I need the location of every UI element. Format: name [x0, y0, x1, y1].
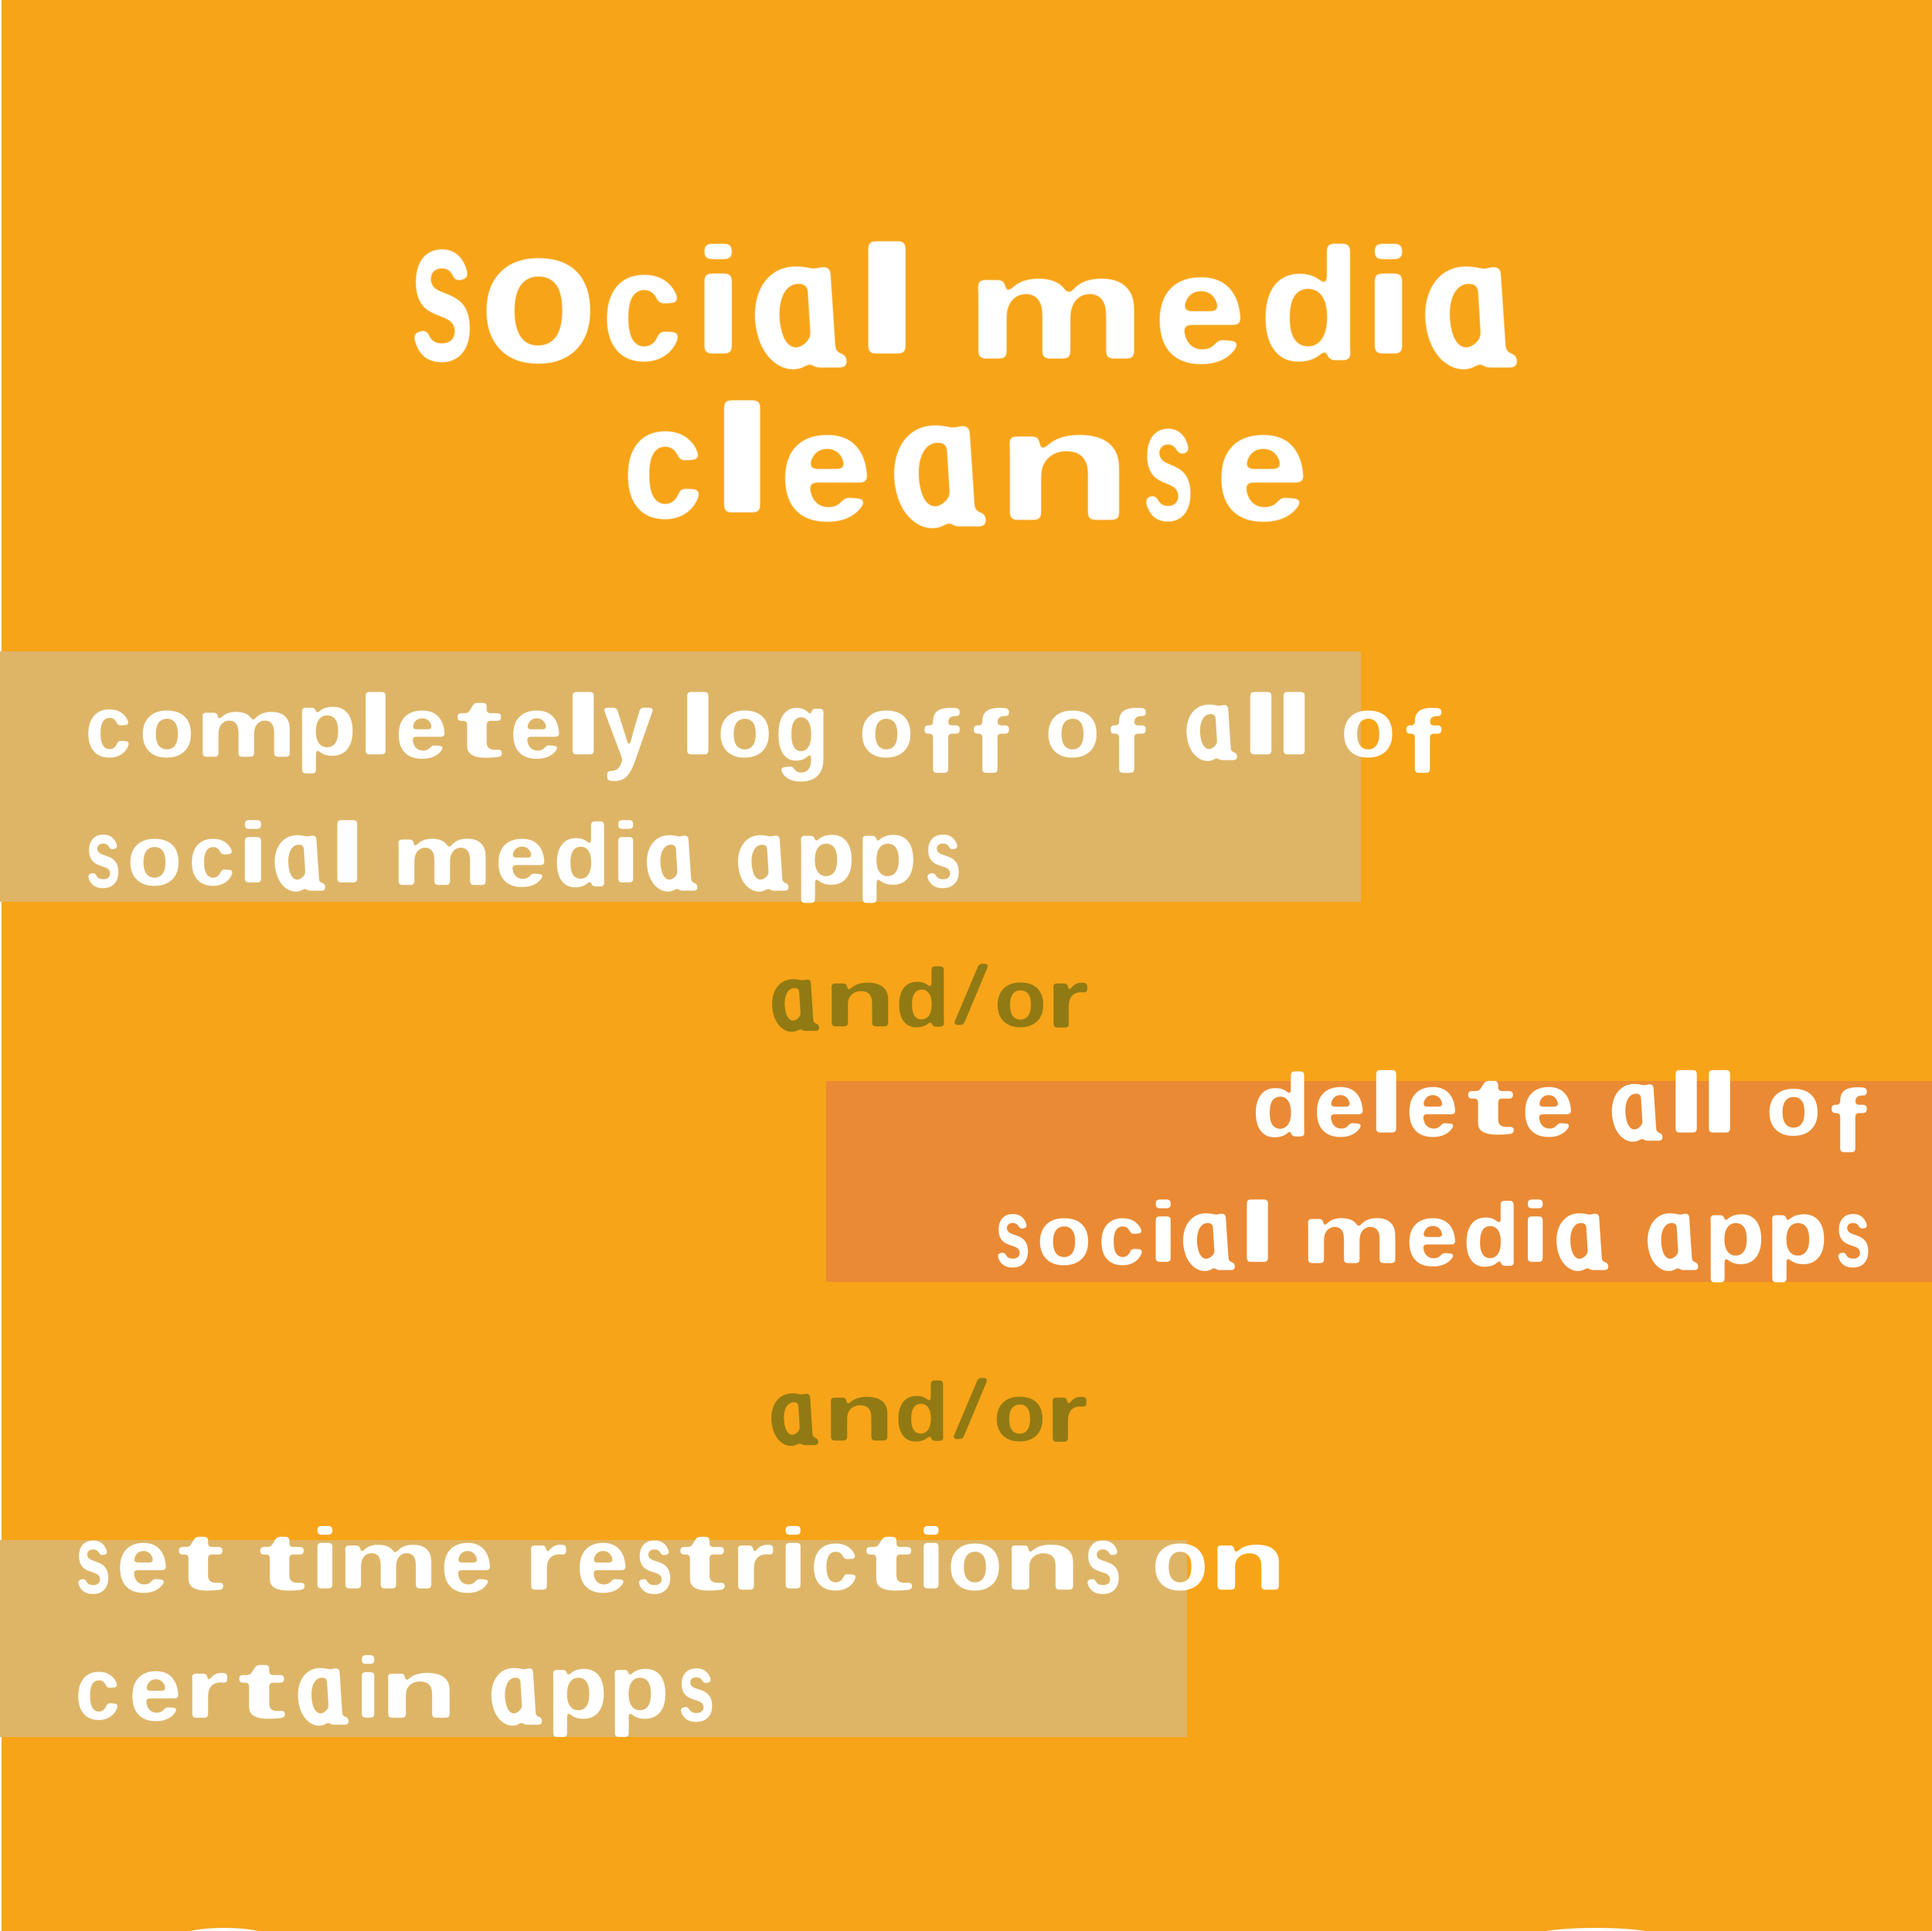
- connector: and/or: [756, 940, 1090, 1051]
- text: set time restrictions: e: [129, 1639, 182, 1740]
- text: delete all of: d: [1252, 1056, 1311, 1156]
- text: set time restrictions: s: [1085, 1505, 1122, 1615]
- title: a: [723, 189, 864, 405]
- connector: and/or: r: [1045, 1367, 1088, 1460]
- text: set time restrictions: s: [679, 1634, 715, 1743]
- text: completely log off: a: [720, 793, 798, 912]
- text: set time restrictions: i: [917, 1511, 947, 1607]
- text: set time restrictions: i: [778, 1511, 808, 1607]
- connector: and/or: d: [895, 1366, 949, 1459]
- text: completely log off: a: [629, 793, 707, 912]
- text: set time restrictions: t: [178, 1517, 226, 1608]
- text: completely log off: f: [1404, 692, 1441, 793]
- text: delete all of: l: [1698, 1056, 1741, 1151]
- text: delete all of: p: [1703, 1181, 1765, 1283]
- panel: time restrictions band: [0, 1540, 1187, 1737]
- title: m: [964, 225, 1147, 391]
- text: set time restrictions: m: [338, 1515, 439, 1606]
- text: delete all of: s: [995, 1179, 1030, 1288]
- text: completely log off: o: [859, 679, 914, 776]
- text: delete all of: i: [1148, 1185, 1179, 1281]
- text: delete all of: t: [1466, 1061, 1515, 1152]
- text: set time restrictions: t: [238, 1645, 287, 1736]
- text: set time restrictions: a: [474, 1625, 552, 1746]
- text: completely log off: d: [553, 806, 611, 906]
- text: delete all of: a: [1538, 1171, 1617, 1291]
- title: l: [849, 214, 925, 387]
- title: i: [691, 217, 746, 386]
- text: set time restrictions: n: [379, 1643, 458, 1736]
- title: o: [479, 188, 598, 404]
- text: set time restrictions: p: [608, 1636, 670, 1738]
- text: set time restrictions: e: [577, 1511, 629, 1612]
- text: delete all of: p: [1765, 1181, 1828, 1283]
- text: completely log off: m: [391, 807, 493, 904]
- text: completely log off: s: [86, 800, 121, 909]
- title: a: [862, 348, 1003, 564]
- text: delete all of: l: [1366, 1056, 1406, 1151]
- text: delete all of: o: [1036, 1187, 1092, 1283]
- text: set time restrictions: n: [1003, 1515, 1081, 1608]
- connector: and/or: d: [896, 952, 951, 1045]
- text: set time restrictions: t: [259, 1517, 307, 1608]
- text: completely log off: e: [495, 807, 548, 906]
- text: set time restrictions: e: [440, 1511, 494, 1612]
- text: set time restrictions: s: [636, 1505, 673, 1615]
- text: delete all of: c: [1098, 1187, 1145, 1283]
- text: completely log off: e: [395, 678, 448, 777]
- decorative white bump bottom left: [174, 1928, 274, 1931]
- title: e: [1153, 219, 1247, 397]
- connector: and/or: /: [954, 950, 989, 1042]
- connector: and/or: n: [823, 1368, 895, 1458]
- text: completely log off: m: [195, 682, 297, 775]
- text: completely log off: l: [328, 805, 368, 902]
- title: [410, 175, 1534, 564]
- text: set time restrictions: i: [355, 1640, 381, 1737]
- title: s: [1141, 367, 1195, 557]
- panel: log off band: [0, 651, 1361, 902]
- text: delete all of: f: [1830, 1072, 1866, 1172]
- text: completely log off: e: [510, 678, 563, 777]
- connector: and/or: r: [1046, 953, 1090, 1046]
- text: set time restrictions: e: [117, 1511, 169, 1612]
- title: l: [706, 372, 779, 546]
- decorative white bump bottom right: [1522, 1928, 1669, 1931]
- panel: delete band: [826, 1081, 1932, 1282]
- text: completely log off: i: [611, 805, 641, 902]
- text: set time restrictions: i: [310, 1511, 340, 1607]
- text: delete all of: e: [1406, 1055, 1458, 1156]
- text: completely log off: t: [456, 682, 504, 775]
- text: delete all of: [995, 1041, 1871, 1291]
- text: set time restrictions: r: [523, 1515, 568, 1608]
- connector: and/or: /: [952, 1364, 988, 1457]
- title: a: [1393, 189, 1534, 405]
- text: set time restrictions: r: [185, 1643, 230, 1736]
- text: set time restrictions: s: [76, 1505, 111, 1615]
- text: set time restrictions: r: [730, 1515, 775, 1608]
- text: completely log off: a: [257, 793, 335, 912]
- text: set time restrictions: [76, 1505, 1287, 1746]
- title: i: [1361, 217, 1417, 386]
- text: completely log off: p: [855, 802, 917, 904]
- text: set time restrictions: o: [1152, 1512, 1209, 1609]
- text: delete all of: o: [1766, 1058, 1821, 1154]
- connector: and/or: o: [993, 1368, 1046, 1459]
- title: n: [994, 378, 1134, 554]
- title: c: [601, 217, 684, 395]
- text: completely log off: f: [1109, 692, 1146, 793]
- title: s: [410, 175, 474, 406]
- text: set time restrictions: c: [811, 1512, 859, 1609]
- title: e: [1215, 377, 1309, 555]
- connector: and/or: n: [824, 954, 896, 1045]
- text: completely log off: p: [794, 802, 856, 904]
- text: completely log off: l: [562, 677, 605, 773]
- connector: and/or: [755, 1354, 1088, 1464]
- text: completely log off: f: [923, 692, 960, 793]
- text: set time restrictions: a: [281, 1625, 359, 1746]
- connector: and/or: o: [995, 954, 1047, 1045]
- title: e: [778, 377, 873, 555]
- text: delete all of: e: [1313, 1055, 1366, 1156]
- text: delete all of: l: [1236, 1185, 1279, 1281]
- text: completely log off: g: [775, 672, 830, 782]
- text: completely log off: o: [717, 679, 773, 776]
- text: set time restrictions: c: [76, 1640, 121, 1739]
- connector: and/or: a: [755, 1354, 827, 1464]
- text: completely log off: f: [972, 692, 1009, 793]
- text: completely log off: o: [1045, 679, 1100, 776]
- text: completely log off: p: [295, 675, 357, 775]
- text: completely log off: o: [1341, 679, 1396, 776]
- text: completely log off: l: [355, 677, 396, 773]
- connector: and/or: a: [756, 940, 828, 1051]
- text: completely log off: l: [677, 677, 719, 773]
- text: completely log off: a: [1169, 662, 1247, 781]
- text: completely log off: c: [189, 807, 236, 904]
- text: set time restrictions: t: [679, 1517, 727, 1608]
- text: delete all of: m: [1300, 1188, 1403, 1282]
- text: completely log off: l: [1273, 677, 1316, 773]
- text: delete all of: e: [1406, 1186, 1458, 1285]
- text: delete all of: d: [1462, 1185, 1520, 1286]
- text: delete all of: a: [1165, 1171, 1244, 1291]
- text: delete all of: e: [1522, 1055, 1574, 1156]
- text: set time restrictions: p: [546, 1636, 608, 1738]
- text: delete all of: a: [1594, 1041, 1672, 1162]
- text: completely log off: s: [924, 800, 961, 909]
- text: completely log off: l: [1240, 677, 1283, 773]
- text: delete all of: s: [1835, 1179, 1871, 1288]
- text: completely log off: c: [85, 678, 132, 777]
- text: delete all of: i: [1520, 1185, 1550, 1281]
- text: set time restrictions: t: [865, 1517, 914, 1608]
- text: delete all of: a: [1630, 1171, 1707, 1291]
- title: d: [1259, 216, 1362, 396]
- text: completely log off: o: [139, 679, 195, 776]
- text: completely log off: [85, 662, 1442, 912]
- text: set time restrictions: o: [947, 1512, 1003, 1609]
- text: delete all of: l: [1665, 1056, 1708, 1151]
- text: completely log off: i: [236, 805, 270, 902]
- text: completely log off: y: [603, 671, 655, 782]
- text: completely log off: o: [127, 807, 182, 904]
- title: c: [622, 372, 705, 553]
- text: set time restrictions: n: [1209, 1515, 1287, 1608]
